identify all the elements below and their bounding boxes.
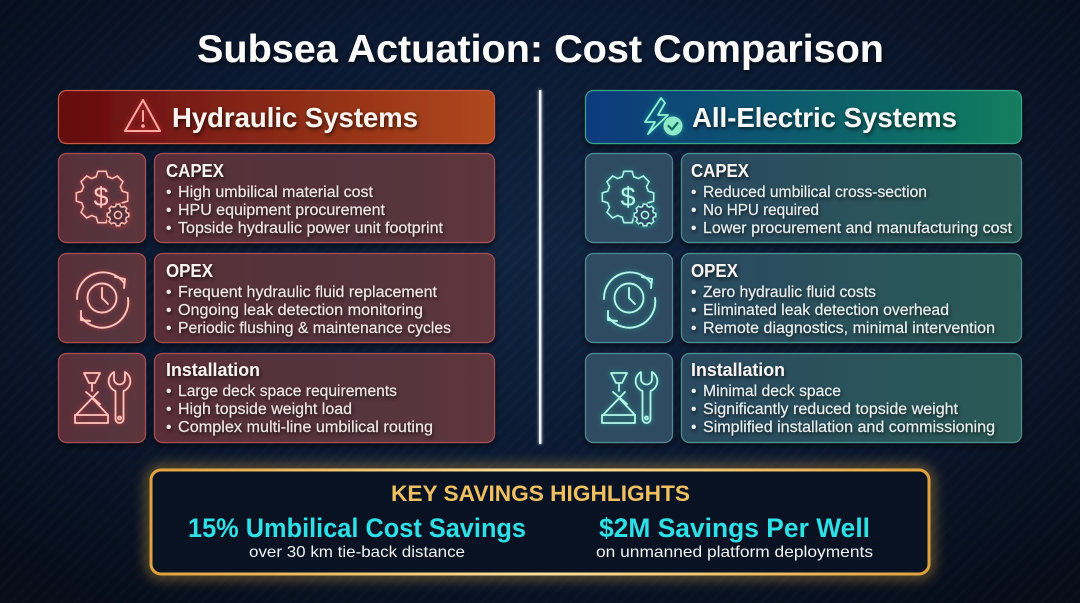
panel: opex text	[682, 254, 1022, 342]
panel: capex text: Reduced umbilical cross-section	[703, 184, 927, 201]
row: electric capex	[586, 154, 1022, 242]
panel: capex text	[682, 154, 1022, 242]
stat: savings per well: on unmanned platform deployments	[596, 544, 873, 561]
icon: crane hook and wrench	[602, 372, 657, 423]
panel: capex text: CAPEX	[691, 161, 749, 181]
title: Subsea Actuation: Cost Comparison	[197, 28, 884, 71]
tile: installation icon	[58, 354, 146, 442]
stat: umbilical savings: over 30 km tie-back distance	[249, 544, 465, 561]
row: electric opex	[586, 254, 1022, 342]
panel: capex text: HPU equipment procurement	[178, 202, 386, 219]
panel: installation text: •	[691, 401, 696, 418]
panel: installation text: Installation	[166, 360, 260, 380]
panel: hydraulic systems	[58, 90, 494, 442]
panel: opex text: •	[691, 302, 696, 319]
panel: capex text: •	[166, 184, 171, 201]
panel: installation text	[682, 354, 1022, 442]
panel: capex text: •	[166, 220, 171, 237]
panel: capex text: •	[691, 202, 696, 219]
tile: opex icon	[58, 254, 146, 342]
row: electric installation	[586, 354, 1022, 442]
icon: crane hook and wrench	[75, 372, 130, 423]
tile: capex icon	[58, 154, 146, 242]
tile: opex icon	[586, 254, 672, 342]
panel: opex text: OPEX	[166, 261, 213, 281]
row: hydraulic opex	[58, 254, 494, 342]
stat: savings per well	[596, 513, 873, 561]
panel: installation text: Minimal deck space	[703, 383, 841, 400]
panel: capex text	[154, 154, 494, 242]
icon: gear with dollar: $	[620, 182, 636, 212]
panel: opex text: OPEX	[691, 261, 738, 281]
panel: installation text: Significantly reduced topside weight	[703, 401, 959, 418]
panel: capex text: No HPU required	[703, 202, 819, 219]
panel: capex text: •	[691, 184, 696, 201]
icon: clock with cycle arrows	[604, 272, 655, 328]
panel: opex text: •	[691, 320, 696, 337]
heading: key savings highlights: KEY SAVINGS HIGHLIGHTS	[391, 481, 690, 506]
icon: clock with cycle arrows	[77, 272, 128, 328]
panel: installation text: Complex multi-line umbilical routing	[178, 419, 433, 436]
callout: key savings highlights	[151, 470, 929, 574]
header: all-electric systems	[586, 90, 1022, 144]
panel: capex text: High umbilical material cost	[178, 184, 374, 201]
icon: lightning bolt with check	[645, 98, 682, 136]
panel: installation text: High topside weight load	[178, 401, 352, 418]
stat: umbilical savings	[188, 513, 526, 561]
panel: opex text: Eliminated leak detection overhead	[703, 302, 949, 319]
tile: installation icon	[586, 354, 672, 442]
panel: opex text: Ongoing leak detection monitoring	[178, 302, 423, 319]
panel: opex text: •	[166, 320, 171, 337]
panel: installation text: •	[166, 383, 171, 400]
panel: opex text: Remote diagnostics, minimal intervention	[703, 320, 995, 337]
panel: capex text: Lower procurement and manufacturing cost	[703, 220, 1013, 237]
panel: opex text: •	[691, 284, 696, 301]
panel: installation text: •	[691, 419, 696, 436]
row: hydraulic capex	[58, 154, 494, 242]
icon: gear with dollar: $	[93, 182, 109, 212]
panel: installation text	[154, 354, 494, 442]
panel: all-electric systems	[586, 90, 1022, 442]
icon: warning triangle	[125, 100, 160, 131]
panel: capex text: Topside hydraulic power unit footprint	[178, 220, 444, 237]
stat: savings per well: $2M Savings Per Well	[599, 513, 870, 543]
panel: installation text: Simplified installation and commissioning	[703, 419, 995, 436]
panel: installation text: Large deck space requirements	[178, 383, 397, 400]
panel: opex text: Zero hydraulic fluid costs	[703, 284, 876, 301]
panel: opex text: Frequent hydraulic fluid replacement	[178, 284, 438, 301]
panel: capex text: CAPEX	[166, 161, 224, 181]
row: hydraulic installation	[58, 354, 494, 442]
panel: opex text	[154, 254, 494, 342]
panel: installation text: Installation	[691, 360, 785, 380]
panel: opex text: •	[166, 284, 171, 301]
header: hydraulic systems	[58, 90, 494, 144]
panel: opex text: •	[166, 302, 171, 319]
tile: capex icon	[586, 154, 672, 242]
panel: installation text: •	[166, 419, 171, 436]
panel: capex text: •	[166, 202, 171, 219]
panel: opex text: Periodic flushing & maintenance cycles	[178, 320, 451, 337]
panel: installation text: •	[166, 401, 171, 418]
heading: all-electric systems: All-Electric Systems	[692, 102, 957, 133]
divider	[539, 90, 541, 444]
stat: umbilical savings: 15% Umbilical Cost Savings	[188, 513, 526, 543]
panel: capex text: •	[691, 220, 696, 237]
panel: installation text: •	[691, 383, 696, 400]
heading: hydraulic systems: Hydraulic Systems	[172, 102, 418, 133]
